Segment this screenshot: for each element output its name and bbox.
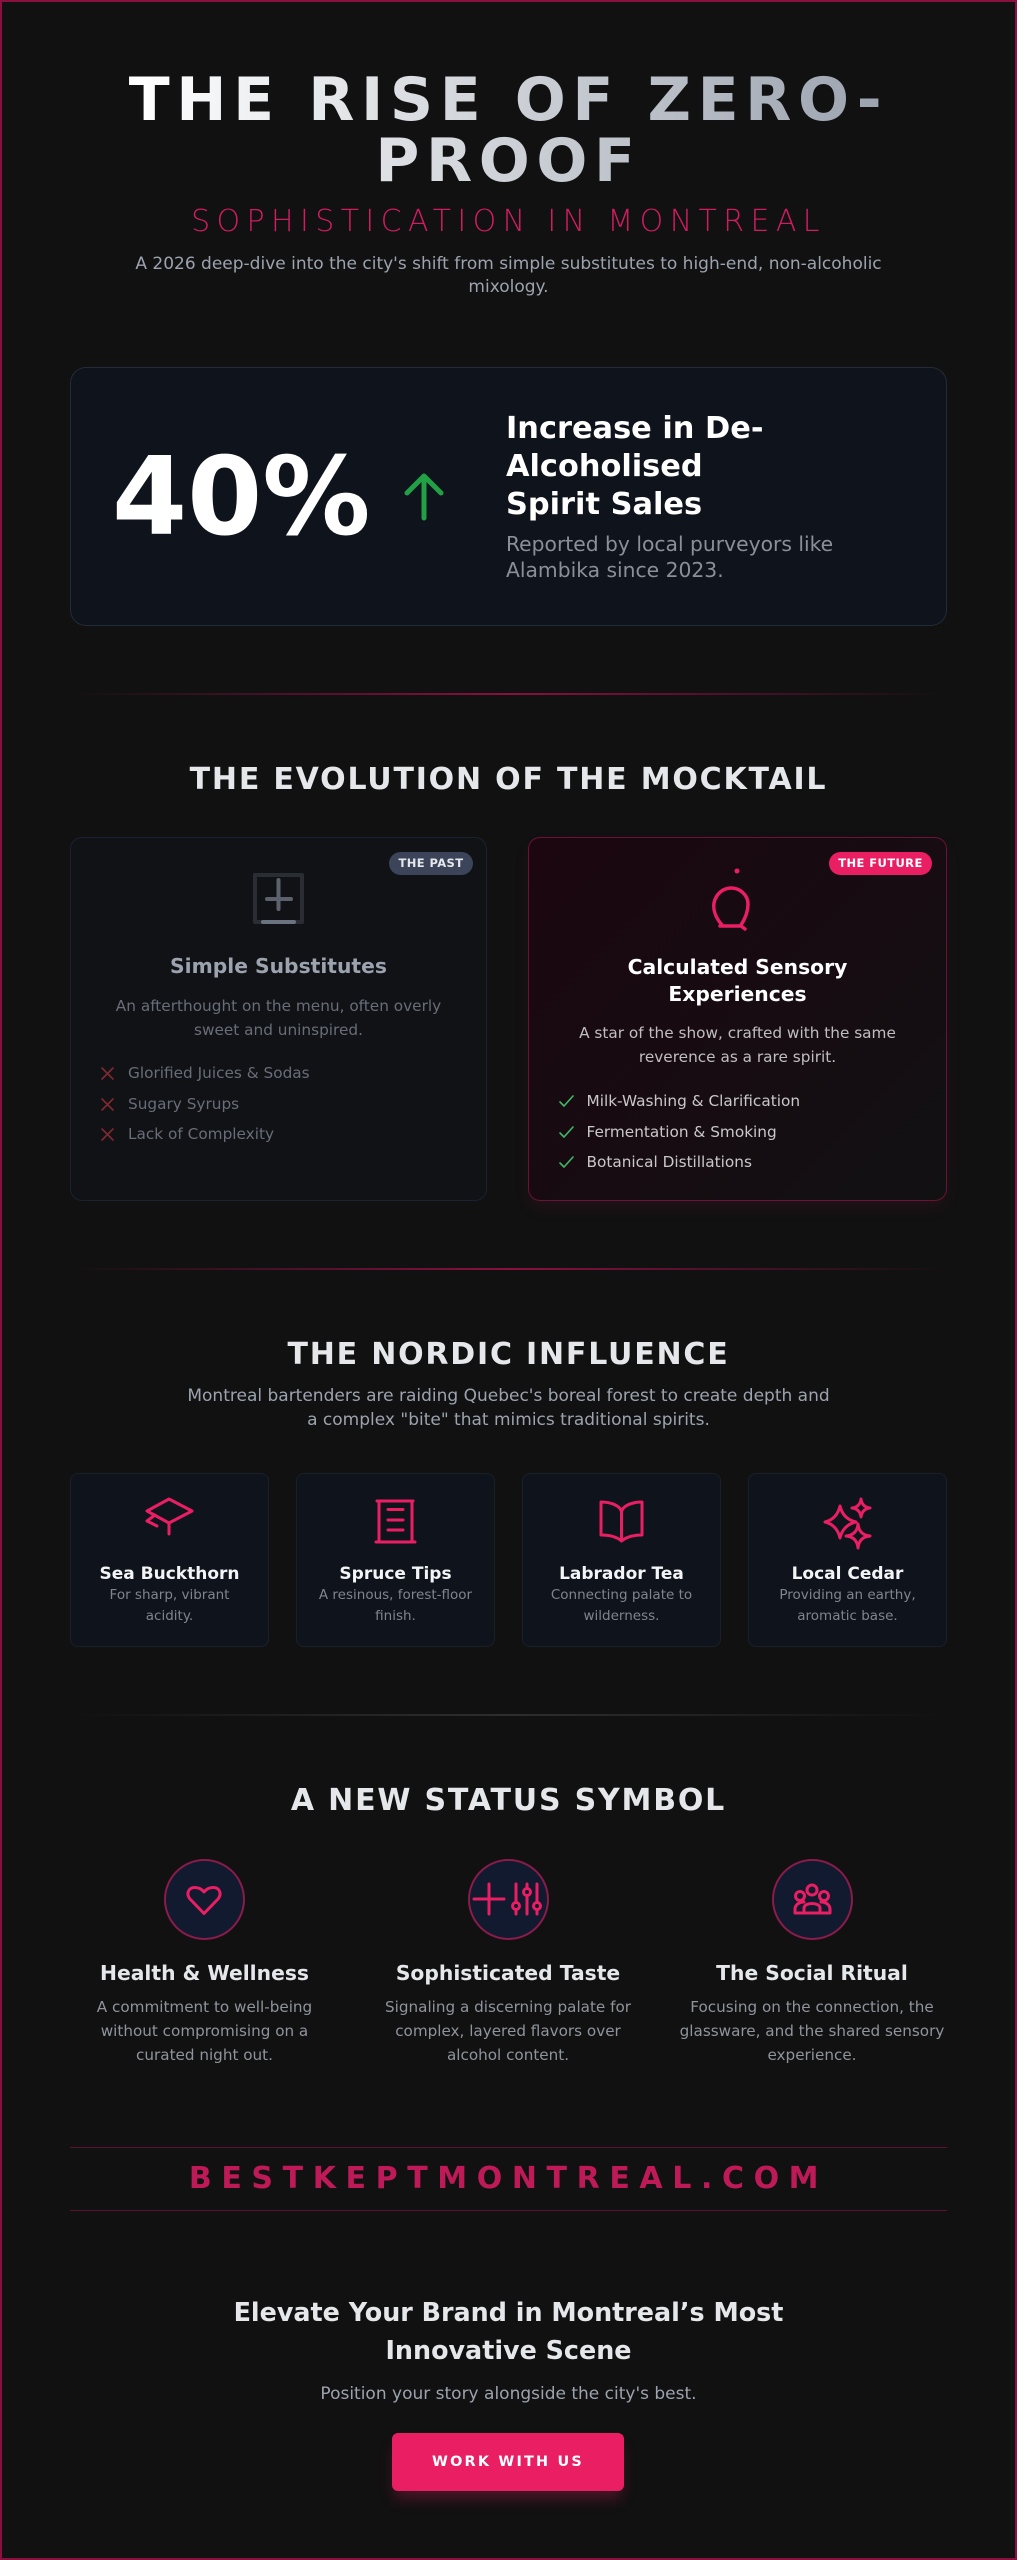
stat heading: Increase in De- <box>506 411 763 446</box>
ingredient note: acidity. <box>146 1608 193 1624</box>
icon: heart <box>164 1859 245 1940</box>
column description: alcohol content. <box>447 2046 569 2064</box>
stat heading <box>506 411 763 522</box>
ingredient note <box>319 1587 472 1624</box>
card description <box>579 1024 896 1066</box>
ingredient name: Spruce Tips <box>339 1564 452 1584</box>
icon: people <box>772 1859 852 1940</box>
card title: Simple Substitutes <box>170 954 387 978</box>
stat description <box>506 532 833 582</box>
badge: the past <box>389 852 473 875</box>
column title: Health & Wellness <box>100 1961 309 1985</box>
stat heading: Spirit Sales <box>506 487 702 522</box>
ingredient name: Labrador Tea <box>559 1564 684 1584</box>
column description: A commitment to well-being <box>97 1998 312 2016</box>
title <box>100 70 917 192</box>
ingredient name: Local Cedar <box>792 1564 903 1584</box>
ingredient name: Sea Buckthorn <box>99 1564 240 1584</box>
icon: sparkles <box>824 1498 872 1550</box>
card description: sweet and uninspired. <box>194 1021 363 1039</box>
cta button <box>392 2433 624 2491</box>
heading: nordic influence: THE NORDIC INFLUENCE <box>287 1337 730 1372</box>
cta heading: Elevate Your Brand in Montreal’s Most <box>234 2297 783 2327</box>
intro text: A 2026 deep-dive into the city's shift from simple substitutes to high-end, non-alcoholic <box>135 254 882 274</box>
column description: glassware, and the shared sensory <box>680 2022 944 2040</box>
subtitle: SOPHISTICATION IN MONTREAL <box>191 204 826 239</box>
stat description: Alambika since 2023. <box>506 558 724 582</box>
card title <box>628 954 847 1006</box>
list item: Fermentation & Smoking <box>586 1122 777 1140</box>
badge: the past: THE PAST <box>399 856 463 870</box>
ingredient note: aromatic base. <box>797 1608 898 1624</box>
card description: A star of the show, crafted with the same <box>579 1024 896 1042</box>
ingredient note: A resinous, forest-floor <box>319 1587 472 1603</box>
list item: Glorified Juices & Sodas <box>128 1064 310 1082</box>
intro text: mixology. <box>468 277 549 297</box>
panel: the social ritual <box>680 1859 944 2064</box>
icon: column <box>374 1500 416 1544</box>
panel: labrador tea <box>522 1473 721 1647</box>
ingredient note <box>110 1587 230 1624</box>
icon: substitute <box>253 873 304 924</box>
icon: glass <box>712 868 750 931</box>
cta button: WORK WITH US <box>432 2454 584 2470</box>
column description: Focusing on the connection, the <box>690 1998 934 2016</box>
heading: status symbol: A NEW STATUS SYMBOL <box>291 1783 726 1818</box>
list item: Lack of Complexity <box>128 1125 274 1143</box>
panel: local cedar <box>748 1473 947 1647</box>
brand banner <box>70 2146 947 2210</box>
nordic intro text <box>187 1386 830 1430</box>
ingredient note: wilderness. <box>584 1608 659 1624</box>
card title: Experiences <box>668 982 807 1006</box>
panel: the past <box>70 837 487 1201</box>
icon: open book <box>600 1500 644 1543</box>
title: THE RISE OF ZERO- <box>129 65 888 135</box>
nordic intro text: a complex "bite" that mimics traditional spirits. <box>307 1410 710 1430</box>
list item: Sugary Syrups <box>128 1095 239 1113</box>
cta heading: Innovative Scene <box>385 2335 632 2365</box>
ingredient note <box>779 1587 916 1624</box>
card title: Calculated Sensory <box>628 954 847 978</box>
column description: Signaling a discerning palate for <box>385 1998 631 2016</box>
big number: 40% <box>112 435 371 560</box>
brand url: BESTKEPTMONTREAL.COM <box>189 2160 828 2196</box>
column description <box>385 1998 631 2064</box>
stat heading: Alcoholised <box>506 449 703 484</box>
column description <box>680 1998 944 2064</box>
heading: evolution: THE EVOLUTION OF THE MOCKTAIL <box>190 762 827 797</box>
panel: the future <box>528 837 947 1201</box>
panel: health and wellness <box>96 1859 312 2064</box>
card description: reverence as a rare spirit. <box>639 1048 836 1066</box>
panel: sophisticated taste <box>385 1859 631 2064</box>
list item: Botanical Distillations <box>586 1153 752 1171</box>
panel: sea buckthorn <box>70 1473 269 1647</box>
ingredient note: Providing an earthy, <box>779 1587 916 1603</box>
ingredient note: finish. <box>375 1608 416 1624</box>
icon: up arrow <box>404 474 444 520</box>
column description: curated night out. <box>136 2046 273 2064</box>
nordic intro text: Montreal bartenders are raiding Quebec's boreal forest to create depth and <box>187 1386 830 1406</box>
column title: Sophisticated Taste <box>396 1961 620 1985</box>
ingredient note: Connecting palate to <box>551 1587 692 1603</box>
column description: experience. <box>767 2046 856 2064</box>
panel: 40% statistic <box>70 367 947 626</box>
stat description: Reported by local purveyors like <box>506 532 833 556</box>
badge: the future <box>829 852 932 875</box>
column description: without compromising on a <box>101 2022 308 2040</box>
column description <box>96 1998 312 2064</box>
column description: complex, layered flavors over <box>395 2022 621 2040</box>
card description: An afterthought on the menu, often overly <box>116 997 441 1015</box>
icon: layers <box>145 1498 194 1536</box>
column title: The Social Ritual <box>716 1961 908 1985</box>
list item: Milk-Washing & Clarification <box>586 1092 800 1110</box>
panel: spruce tips <box>296 1473 495 1647</box>
cta heading <box>234 2297 783 2365</box>
cta description: Position your story alongside the city's best. <box>320 2384 697 2404</box>
ingredient note: For sharp, vibrant <box>110 1587 229 1603</box>
card description <box>116 997 441 1039</box>
badge: the future: THE FUTURE <box>838 856 923 870</box>
intro text <box>135 254 882 297</box>
icon: plus and sliders <box>468 1859 548 1940</box>
ingredient note <box>551 1587 692 1624</box>
title: PROOF <box>375 126 642 196</box>
